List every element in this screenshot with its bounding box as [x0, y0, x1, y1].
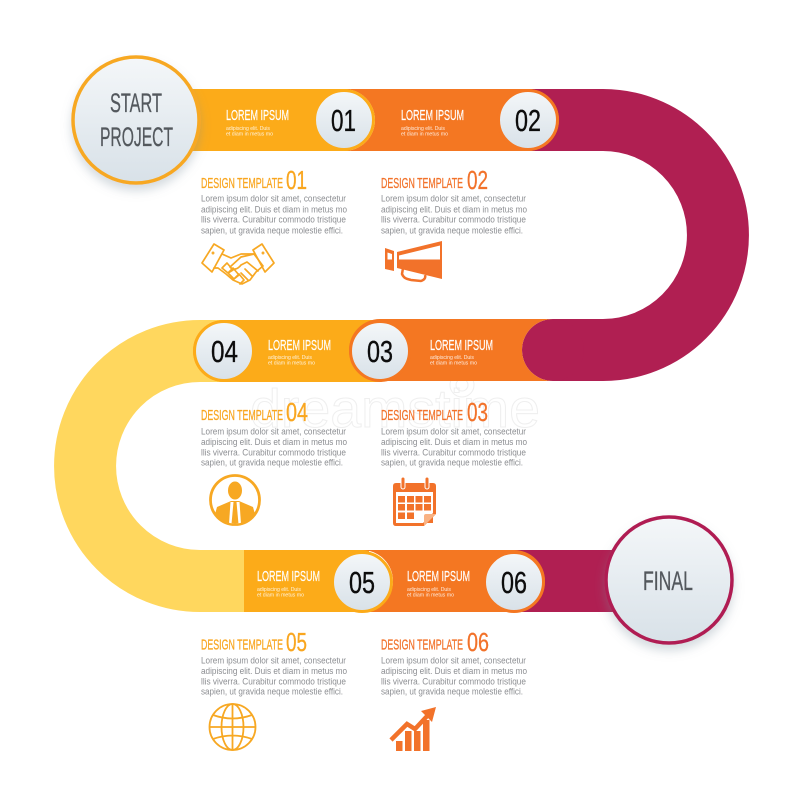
- band label 05: [257, 568, 320, 598]
- step badge 02: 02: [515, 103, 541, 138]
- text block 02: 02: [467, 165, 488, 195]
- text block 06: [381, 627, 527, 696]
- watermark: dreamstime: [250, 379, 540, 439]
- text block 05: [201, 627, 347, 696]
- band label 03: et diam in metus mo: [430, 360, 477, 366]
- band label 05: adipiscing elit. Duis: [257, 587, 301, 593]
- final circle: FINAL: [643, 566, 693, 596]
- road: crimson end cap: [522, 319, 584, 381]
- text block 03: adipiscing elit. Duis et diam in metus mo: [381, 437, 527, 447]
- step badge 05: [332, 552, 392, 612]
- text block 03: llis viverra. Curabitur commodo tristique: [381, 448, 526, 458]
- text block 06: llis viverra. Curabitur commodo tristique: [381, 676, 526, 686]
- start circle: [73, 57, 199, 183]
- band label 01: adipiscing elit. Duis: [226, 126, 270, 132]
- step badge 06: 06: [501, 565, 527, 600]
- text block 06: 06: [467, 627, 489, 657]
- segment 03 band: [349, 319, 553, 381]
- text block 02: sapien, ut gravida neque molestie effici.: [381, 226, 523, 236]
- text block 03: 03: [467, 397, 488, 427]
- text block 04: adipiscing elit. Duis et diam in metus mo: [201, 437, 347, 447]
- segment 02 band: [344, 89, 559, 151]
- band label 02: LOREM IPSUM: [401, 107, 464, 124]
- band label 03: [430, 337, 493, 366]
- step badge 02: [498, 90, 558, 150]
- step badge 04: 04: [211, 334, 238, 369]
- icon: businessman: [210, 476, 260, 525]
- text block 02: Lorem ipsum dolor sit amet, consectetur: [381, 194, 526, 204]
- segment 01 band: [190, 89, 350, 151]
- band label 04: LOREM IPSUM: [268, 337, 331, 354]
- text block 04: DESIGN TEMPLATE: [201, 408, 283, 424]
- text block 03: DESIGN TEMPLATE: [381, 408, 463, 424]
- text block 01: 01: [286, 165, 307, 195]
- icon: handshake: [202, 244, 274, 284]
- step badge 01: [314, 90, 374, 150]
- text block 01: Lorem ipsum dolor sit amet, consectetur: [201, 194, 346, 204]
- band label 04: [268, 337, 331, 366]
- band label 05: LOREM IPSUM: [257, 568, 320, 585]
- step badge 01: 01: [331, 103, 356, 138]
- band label 03: adipiscing elit. Duis: [430, 355, 474, 361]
- text block 06: DESIGN TEMPLATE: [381, 638, 463, 654]
- band label 03: LOREM IPSUM: [430, 337, 493, 354]
- serpentine road: [85, 89, 718, 612]
- text block 01: DESIGN TEMPLATE: [201, 176, 283, 192]
- text block 04: 04: [286, 397, 308, 427]
- step badge 03: 03: [367, 334, 393, 369]
- band label 04: et diam in metus mo: [268, 360, 315, 366]
- text block 04: Lorem ipsum dolor sit amet, consectetur: [201, 426, 346, 436]
- band label 01: et diam in metus mo: [226, 132, 273, 138]
- text block 03: Lorem ipsum dolor sit amet, consectetur: [381, 426, 526, 436]
- road: crimson final segment: [510, 550, 630, 612]
- text block 04: llis viverra. Curabitur commodo tristique: [201, 448, 346, 458]
- text block 03: [381, 397, 527, 468]
- text block 06: Lorem ipsum dolor sit amet, consectetur: [381, 656, 526, 666]
- text block 01: [201, 165, 347, 236]
- step badge 06: [484, 552, 544, 612]
- text block 02: DESIGN TEMPLATE: [381, 176, 463, 192]
- road: yellow left curve: [85, 351, 250, 581]
- step badge 05: 05: [349, 565, 375, 600]
- road: crimson right curve: [525, 120, 718, 350]
- text block 05: llis viverra. Curabitur commodo tristique: [201, 676, 346, 686]
- segment 05 band: [244, 550, 369, 612]
- band label 01: LOREM IPSUM: [226, 107, 289, 124]
- band label 01: [226, 107, 289, 138]
- segment 04 band: [193, 320, 380, 382]
- text block 01: llis viverra. Curabitur commodo tristique: [201, 214, 346, 224]
- band label 06: et diam in metus mo: [407, 592, 454, 598]
- start circle: PROJECT: [100, 122, 173, 152]
- band label 06: adipiscing elit. Duis: [407, 587, 451, 593]
- band label 06: LOREM IPSUM: [407, 568, 470, 585]
- text block 01: sapien, ut gravida neque molestie effici.: [201, 226, 343, 236]
- icon: growth chart: [391, 707, 436, 751]
- text block 06: adipiscing elit. Duis et diam in metus mo: [381, 666, 527, 676]
- text block 05: adipiscing elit. Duis et diam in metus mo: [201, 666, 347, 676]
- start circle: START: [110, 88, 162, 118]
- band label 04: adipiscing elit. Duis: [268, 355, 312, 361]
- band label 06: [407, 568, 470, 598]
- text block 05: DESIGN TEMPLATE: [201, 638, 283, 654]
- text block 04: sapien, ut gravida neque molestie effici.: [201, 458, 343, 468]
- text block 03: sapien, ut gravida neque molestie effici.: [381, 458, 523, 468]
- text block 02: [381, 165, 527, 236]
- band label 02: et diam in metus mo: [401, 132, 448, 138]
- icon: megaphone: [385, 241, 442, 281]
- icon: calendar: [393, 477, 436, 526]
- text block 05: 05: [286, 627, 307, 657]
- text block 04: [201, 397, 347, 468]
- band label 02: adipiscing elit. Duis: [401, 126, 445, 132]
- text block 02: llis viverra. Curabitur commodo tristique: [381, 214, 526, 224]
- icon: globe: [210, 704, 256, 750]
- segment 06 band: [362, 550, 545, 612]
- final circle: [606, 517, 732, 643]
- band label 02: [401, 107, 464, 138]
- text block 02: adipiscing elit. Duis et diam in metus mo: [381, 204, 527, 214]
- text block 05: Lorem ipsum dolor sit amet, consectetur: [201, 656, 346, 666]
- step badge 04: [194, 322, 254, 380]
- text block 05: sapien, ut gravida neque molestie effici.: [201, 686, 343, 696]
- text block 01: adipiscing elit. Duis et diam in metus mo: [201, 204, 347, 214]
- band label 05: et diam in metus mo: [257, 592, 304, 598]
- text block 06: sapien, ut gravida neque molestie effici.: [381, 686, 523, 696]
- step badge 03: [350, 322, 410, 380]
